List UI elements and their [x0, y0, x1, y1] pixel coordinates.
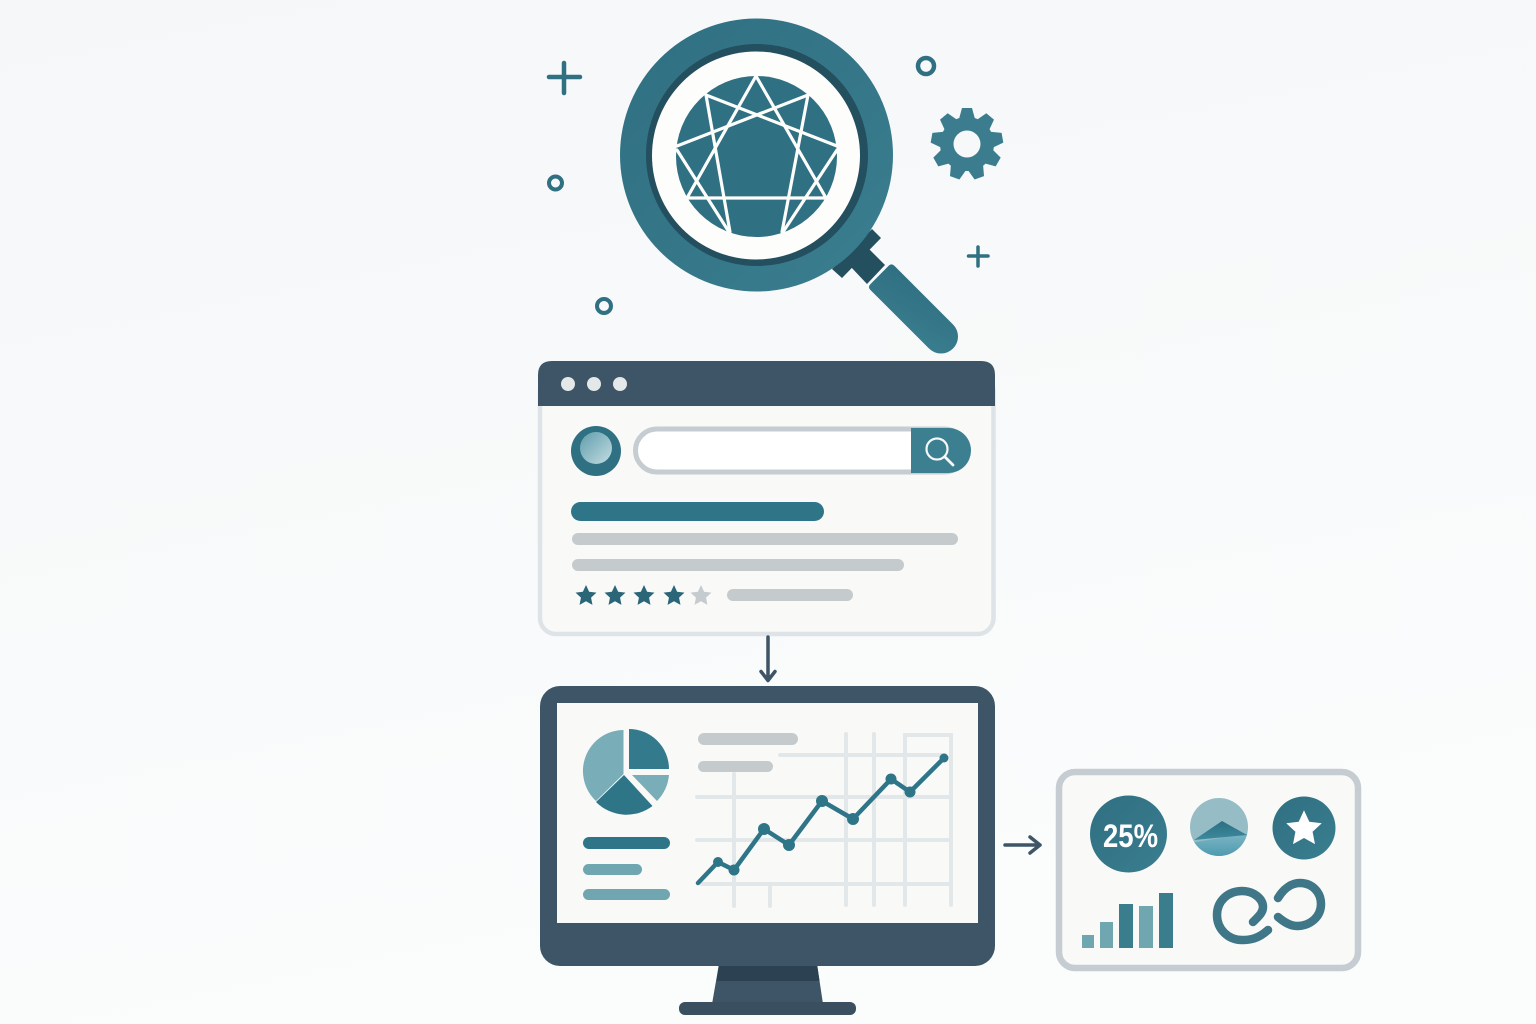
rating label line — [727, 589, 853, 601]
chart label line — [698, 733, 798, 745]
handle neck — [850, 248, 885, 284]
infographic canvas — [538, 18, 1362, 1015]
mini bar chart — [1082, 893, 1173, 948]
browser body — [540, 375, 994, 634]
icon: plus large — [549, 63, 580, 93]
lens white ring — [652, 52, 860, 260]
arrow: browser to monitor — [761, 637, 775, 680]
monitor base — [679, 1002, 856, 1015]
line chart grid — [697, 734, 951, 906]
monitor stand — [712, 964, 823, 1004]
icon: gear — [930, 108, 1004, 181]
star rating — [576, 585, 711, 605]
magnifying glass — [620, 18, 965, 361]
search button — [911, 428, 971, 473]
pie chart — [583, 729, 669, 815]
badge: star — [1272, 796, 1336, 860]
browser title bar — [538, 361, 995, 406]
badge: 25 percent — [1090, 796, 1167, 872]
monitor dashboard — [540, 686, 995, 1015]
legend line — [583, 889, 670, 900]
icon: plus small — [968, 247, 988, 266]
lens dark ring — [646, 44, 868, 266]
panel: results summary — [1059, 772, 1358, 968]
icon: search magnifier — [926, 438, 953, 465]
line chart — [698, 754, 948, 883]
handle collar — [832, 229, 881, 278]
chart label line — [698, 761, 773, 772]
arrow: monitor to results — [1005, 837, 1040, 853]
avatar — [571, 426, 621, 476]
result title bar — [571, 502, 824, 521]
icon: chain link — [1217, 883, 1321, 940]
lens outer ring — [620, 18, 893, 292]
monitor bezel — [540, 686, 995, 966]
result text line — [572, 559, 904, 571]
handle grip — [867, 263, 965, 361]
search field — [636, 429, 966, 472]
panel: search browser window — [538, 361, 995, 634]
legend line — [583, 837, 670, 849]
window dots — [561, 377, 627, 391]
badge: mountain disc — [1190, 798, 1250, 856]
monitor screen — [557, 703, 978, 923]
icon: small ring top right — [918, 58, 934, 74]
result text line — [572, 533, 958, 545]
icon: small ring left — [549, 176, 562, 190]
legend line — [583, 864, 642, 875]
badge: 25 percent: 25% — [1103, 818, 1158, 854]
panel frame — [1059, 772, 1358, 968]
icon: small ring lower left — [597, 299, 611, 313]
enneagram disc — [676, 76, 837, 237]
enneagram lines — [677, 76, 837, 232]
